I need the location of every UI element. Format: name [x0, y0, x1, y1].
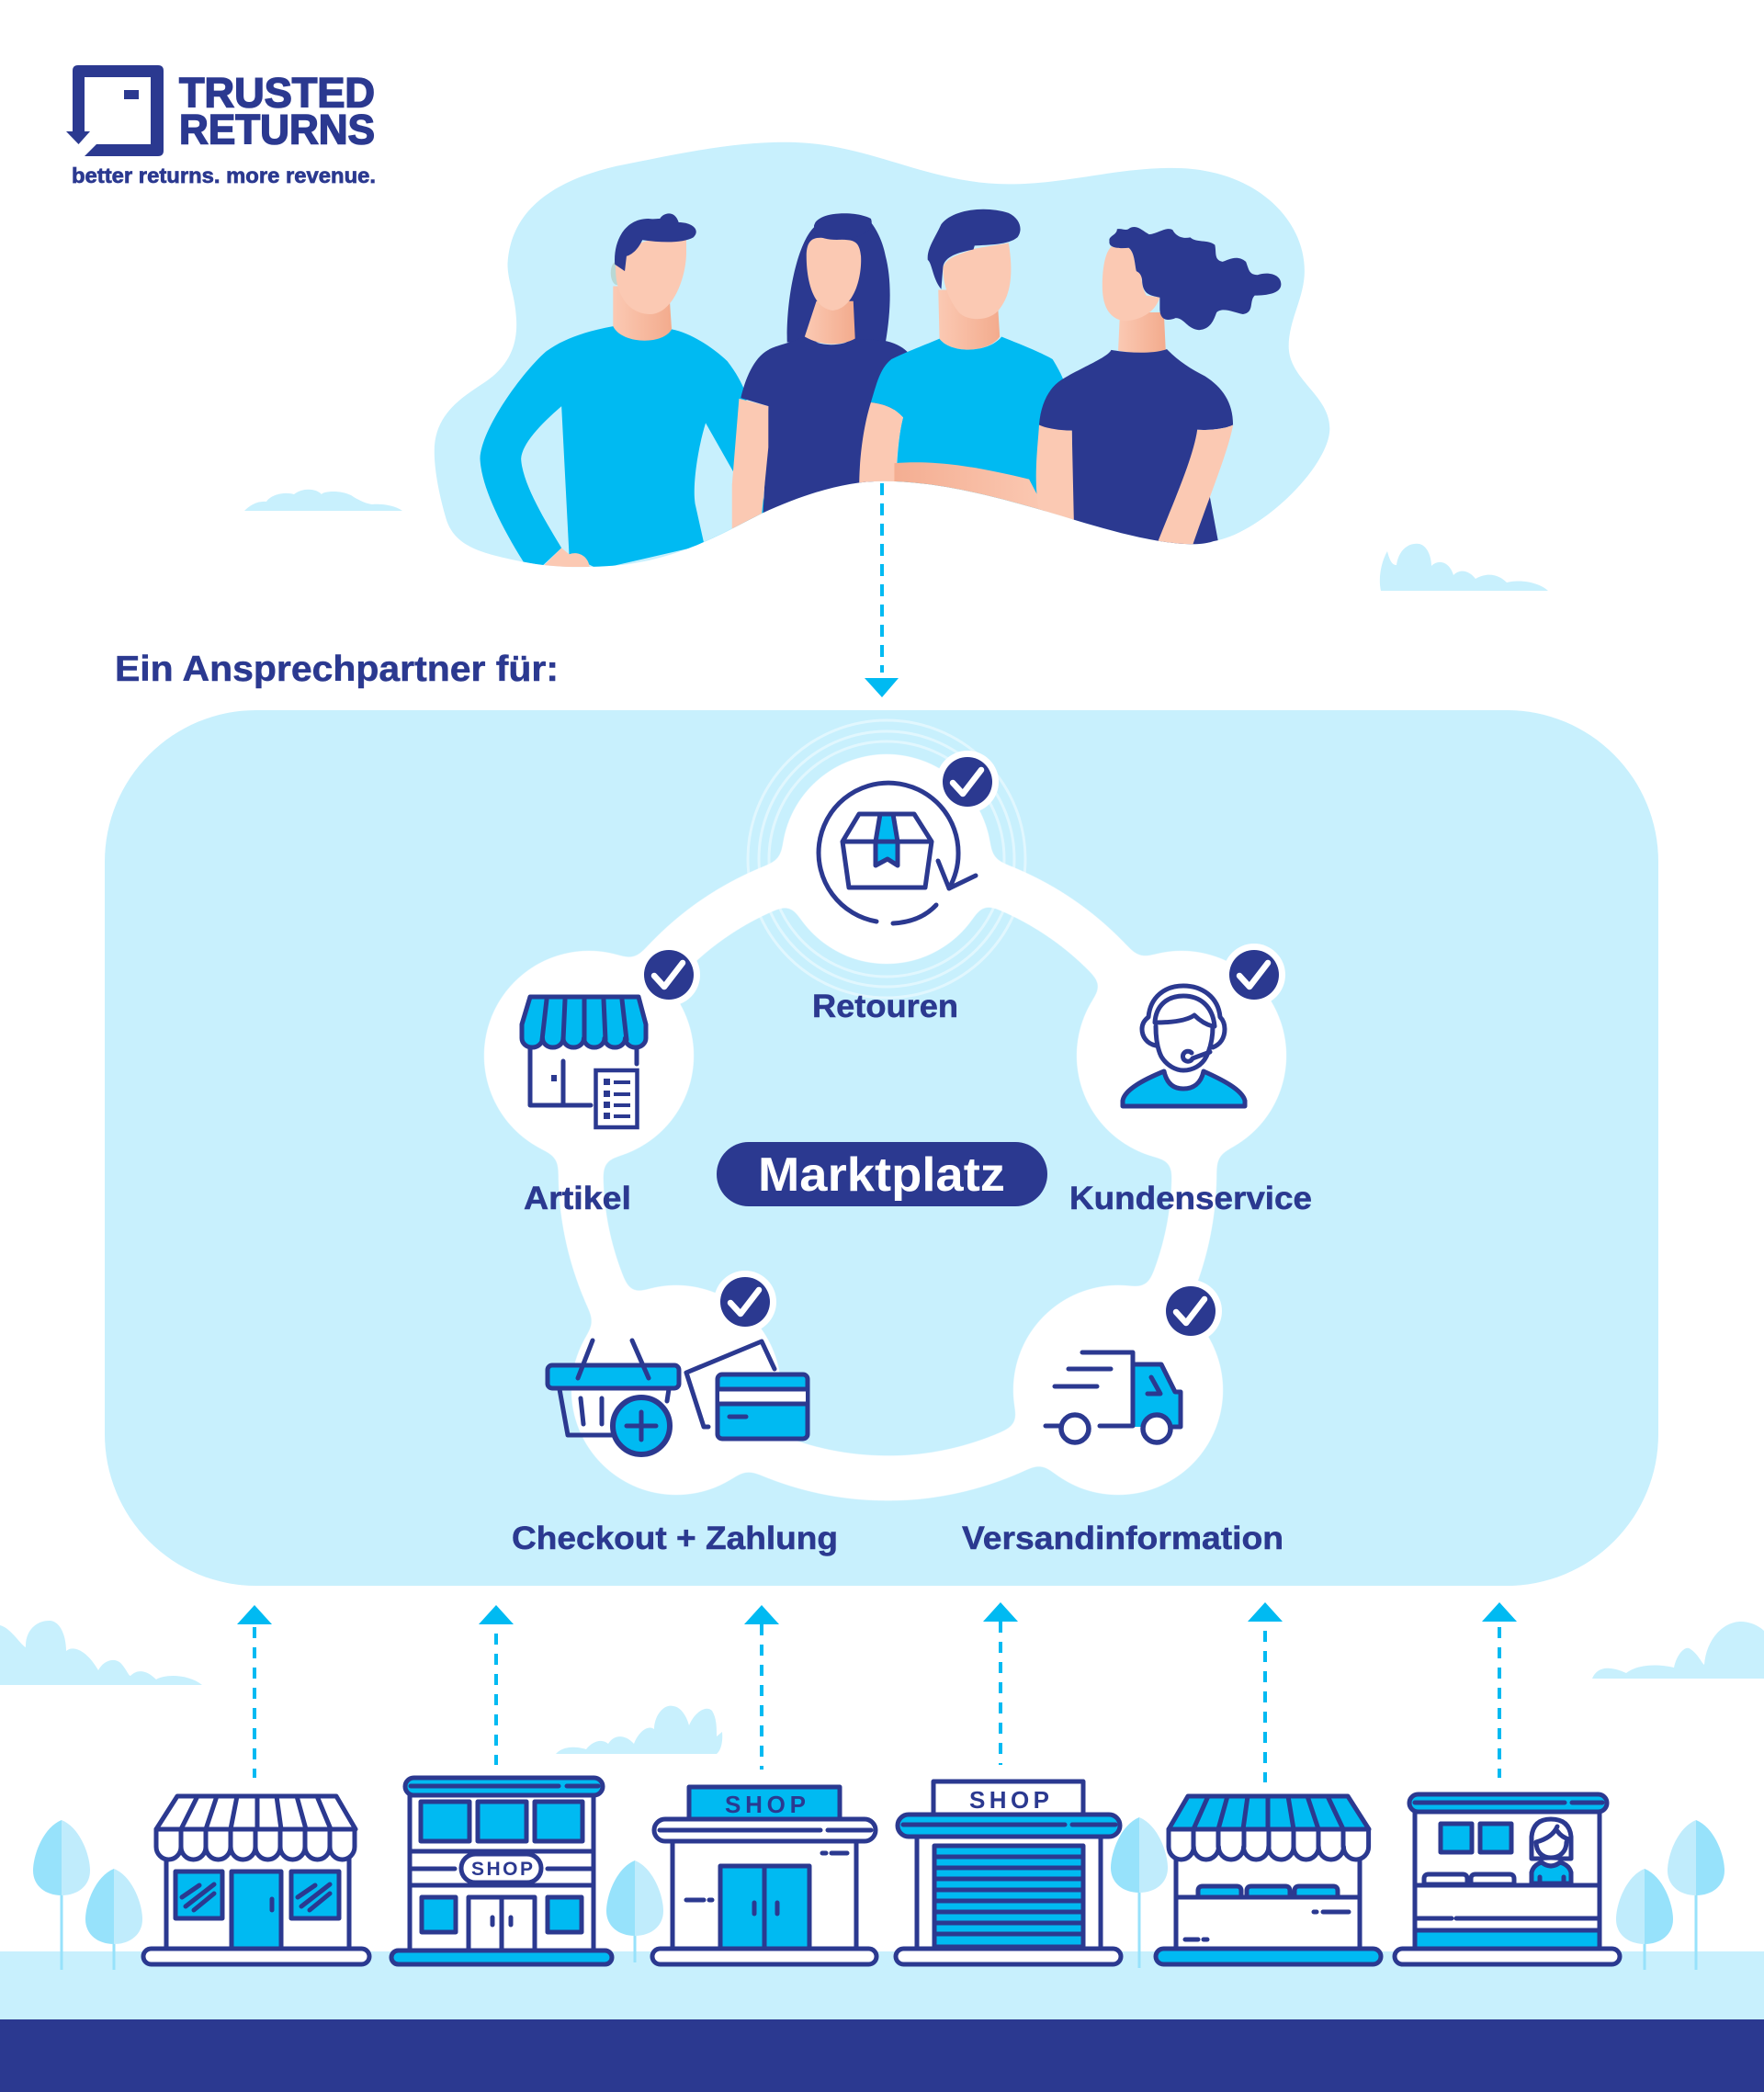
- shop 2: two storey shop: [391, 1778, 612, 1964]
- shop 3: SHOP sign with double door: [652, 1787, 876, 1964]
- logo wordmark: TRUSTED: [179, 70, 375, 116]
- arrow: shop 4 up: [983, 1602, 1018, 1765]
- arrow: shop 5 up: [1248, 1602, 1283, 1782]
- icon: customer service agent: [1123, 986, 1245, 1106]
- icon: returns box: [819, 783, 976, 923]
- panel: marketplace services: [105, 710, 1658, 1586]
- shop 6: kiosk with clerk: [1395, 1794, 1620, 1964]
- label: customer service: Kundenservice: [1069, 1181, 1312, 1216]
- shop 4: roller shutter: [896, 1781, 1121, 1964]
- cloud: [0, 1621, 202, 1685]
- person 1: [481, 213, 768, 570]
- person 2: [732, 213, 909, 534]
- arrow: shop 2 up: [479, 1605, 514, 1765]
- arrow: team down to panel: [865, 483, 899, 697]
- footer bar: [0, 2019, 1764, 2092]
- shop 3: SHOP sign with double door: SHOP: [725, 1791, 806, 1818]
- cloud: [1592, 1622, 1764, 1679]
- icon: shop with article list: [522, 997, 646, 1127]
- icon: basket and credit card: [548, 1340, 808, 1454]
- illustration: customer service team: [435, 142, 1329, 570]
- label: checkout and payment: Checkout + Zahlung: [512, 1521, 838, 1556]
- logo: Trusted Returns: [66, 65, 376, 187]
- shop 2: two storey shop: SHOP: [471, 1859, 533, 1880]
- tagline: better returns. more revenue.: [72, 164, 376, 187]
- centre label: Marktplatz: [717, 1142, 1047, 1206]
- person 4: [1036, 227, 1281, 548]
- person 3: [859, 209, 1064, 519]
- check badge: customer service: [1223, 944, 1285, 1006]
- background blob: [435, 142, 1329, 567]
- halo rings around returns: [748, 720, 1025, 998]
- label: article: Artikel: [524, 1181, 631, 1216]
- centre label: Marktplatz: Marktplatz: [758, 1148, 1005, 1202]
- shop 1: striped awning: [143, 1796, 369, 1964]
- check badge: returns: [936, 751, 999, 813]
- cloud: [244, 490, 402, 511]
- arrow: shop 3 up: [744, 1605, 779, 1770]
- tree: [606, 1860, 663, 1962]
- heading: Ein Ansprechpartner für:: [115, 650, 559, 689]
- check badge: article: [638, 944, 700, 1006]
- cloud: [556, 1706, 722, 1754]
- logo wordmark line 2: RETURNS: [179, 107, 375, 153]
- check badge: shipping: [1159, 1280, 1222, 1342]
- arrow: shop 6 up: [1482, 1602, 1517, 1778]
- arrow: shop 1 up: [237, 1605, 272, 1778]
- connecting ring and node circles: [484, 754, 1286, 1495]
- shop 5: market stall: [1156, 1796, 1381, 1964]
- tree: [85, 1869, 142, 1970]
- tree: [1616, 1869, 1673, 1970]
- tree: [1668, 1820, 1724, 1970]
- tree: [1111, 1817, 1168, 1968]
- logo mark: [66, 65, 164, 156]
- shop 4: roller shutter: SHOP: [969, 1786, 1049, 1814]
- diagram: service ring: [484, 720, 1286, 1495]
- four people: [481, 209, 1281, 570]
- ground: [0, 1951, 1764, 2019]
- check badge: checkout: [714, 1271, 776, 1333]
- label: shipping information: Versandinformation: [962, 1521, 1283, 1556]
- cloud: [1380, 544, 1548, 591]
- label: returns: Retouren: [812, 989, 958, 1024]
- icon: delivery truck: [1046, 1352, 1181, 1442]
- tree: [33, 1820, 90, 1970]
